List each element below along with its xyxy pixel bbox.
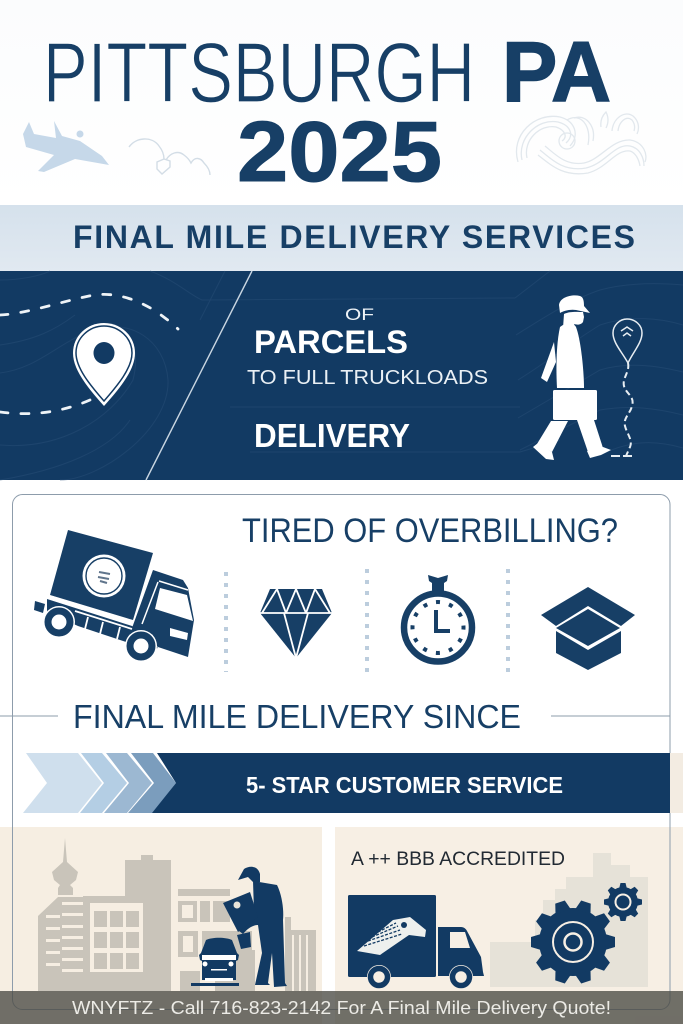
panel: navy delivery banner [0,271,683,480]
heading: final mile delivery services: FINAL MILE DELIVERY SERVICES [73,219,635,255]
panel: main card outline [12,494,670,1010]
icon: small gear [604,883,642,921]
panel: city skyline with courier [0,827,322,1024]
footer call to action bar [0,991,683,1024]
title: PA [502,25,611,120]
text: of parcels to full truckloads delivery: TO FULL TRUCKLOADS [247,367,488,389]
card outline over panels [12,827,670,1010]
dotted dividers [226,569,508,672]
icon: box truck with parcel [348,895,484,989]
skyline windows [46,902,308,991]
icon: courier loading parcel [223,867,287,987]
banner: chevrons and 5-star customer service [23,753,670,813]
icon: delivery truck [34,530,194,662]
icon: diamond [260,589,332,658]
panel: services band [0,205,683,271]
icon: open box [541,587,635,670]
banner: chevrons and 5-star customer service: 5- STAR CUSTOMER SERVICE [246,772,563,798]
title [43,25,611,200]
faint right edge of banner [670,753,683,813]
icon: walking courier with briefcase [533,295,611,460]
heading: final mile delivery since: FINAL MILE DELIVERY SINCE [73,698,521,735]
text: of parcels to full truckloads delivery: PARCELS [254,324,408,360]
icon: bird and heart doodle [129,139,210,175]
text: of parcels to full truckloads delivery: OF [345,305,374,324]
title: 2025 [237,105,442,200]
icon: car front view [191,938,239,986]
icon: stopwatch clock [404,575,472,662]
icon: decorative swirl [516,112,646,174]
icon: location pin [73,323,135,406]
text: of parcels to full truckloads delivery [247,305,488,454]
text: of parcels to full truckloads delivery: DELIVERY [254,417,410,454]
icon: balloon marker with dashed trail [611,319,642,456]
skyline [38,838,316,991]
icon: airplane [23,121,109,172]
panel: BBB accredited [335,827,683,1024]
label: A++ BBB accredited: A ++ BBB ACCREDITED [351,848,565,870]
dashed route [0,294,178,414]
heading: tired of overbilling: TIRED OF OVERBILLING? [242,512,618,550]
footer call to action bar: WNYFTZ - Call 716-823-2142 For A Final Mile Delivery Quote! [72,998,611,1018]
diagonal divider [146,271,252,480]
title: PITTSBURGH [43,26,475,121]
icon: large gear [531,900,615,984]
